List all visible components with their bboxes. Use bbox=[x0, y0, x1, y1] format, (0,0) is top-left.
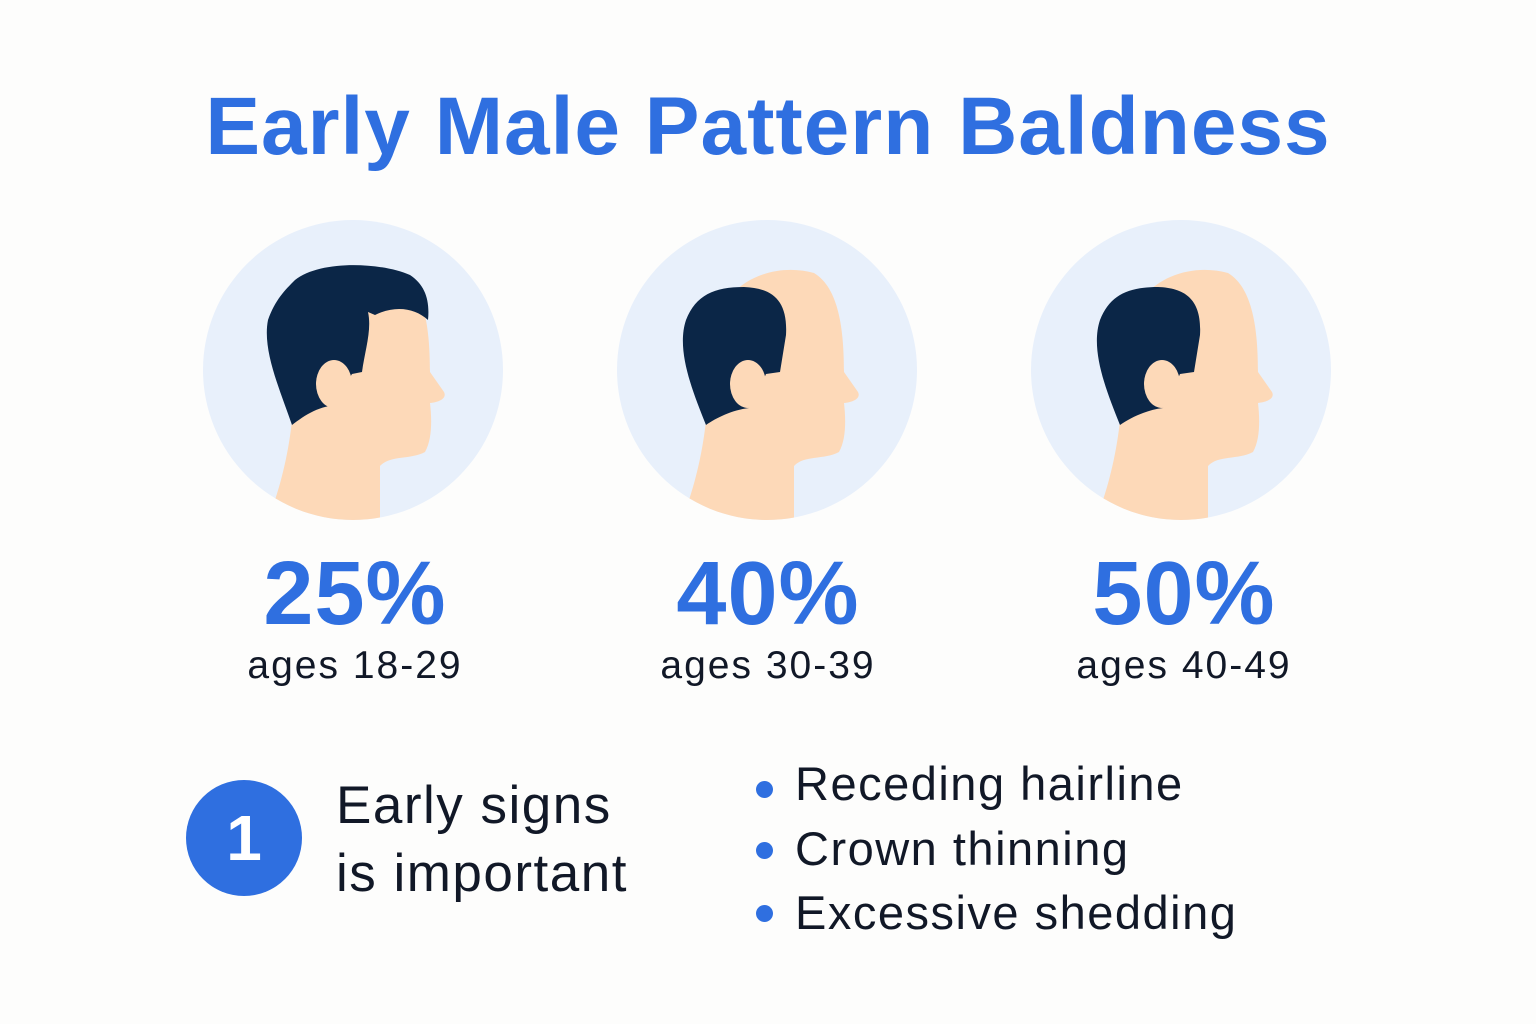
stat 3: 50% bbox=[1092, 544, 1276, 644]
bullet list: Crown thinning bbox=[795, 822, 1130, 875]
title: Early Male Pattern Baldness bbox=[205, 81, 1331, 172]
label 1: ages 18-29 bbox=[247, 644, 463, 687]
bullet list: Excessive shedding bbox=[795, 886, 1237, 939]
text block: early signs: Early signs bbox=[336, 776, 612, 835]
stat 1: 25% bbox=[263, 544, 447, 644]
bullet list: Receding hairline bbox=[795, 757, 1184, 810]
icon: head 3 bbox=[1031, 220, 1331, 525]
stat 2: 40% bbox=[676, 544, 860, 644]
icon: head 2 bbox=[617, 220, 917, 525]
text block: early signs bbox=[336, 776, 628, 903]
illustrations: three heads bbox=[203, 220, 1331, 520]
text block: early signs: is important bbox=[336, 844, 628, 903]
number badge: 1 bbox=[226, 802, 262, 874]
icon: head 1 bbox=[203, 220, 503, 525]
bullet list bbox=[756, 757, 1237, 939]
label 2: ages 30-39 bbox=[660, 644, 876, 687]
label 3: ages 40-49 bbox=[1076, 644, 1292, 687]
number badge bbox=[186, 780, 302, 896]
